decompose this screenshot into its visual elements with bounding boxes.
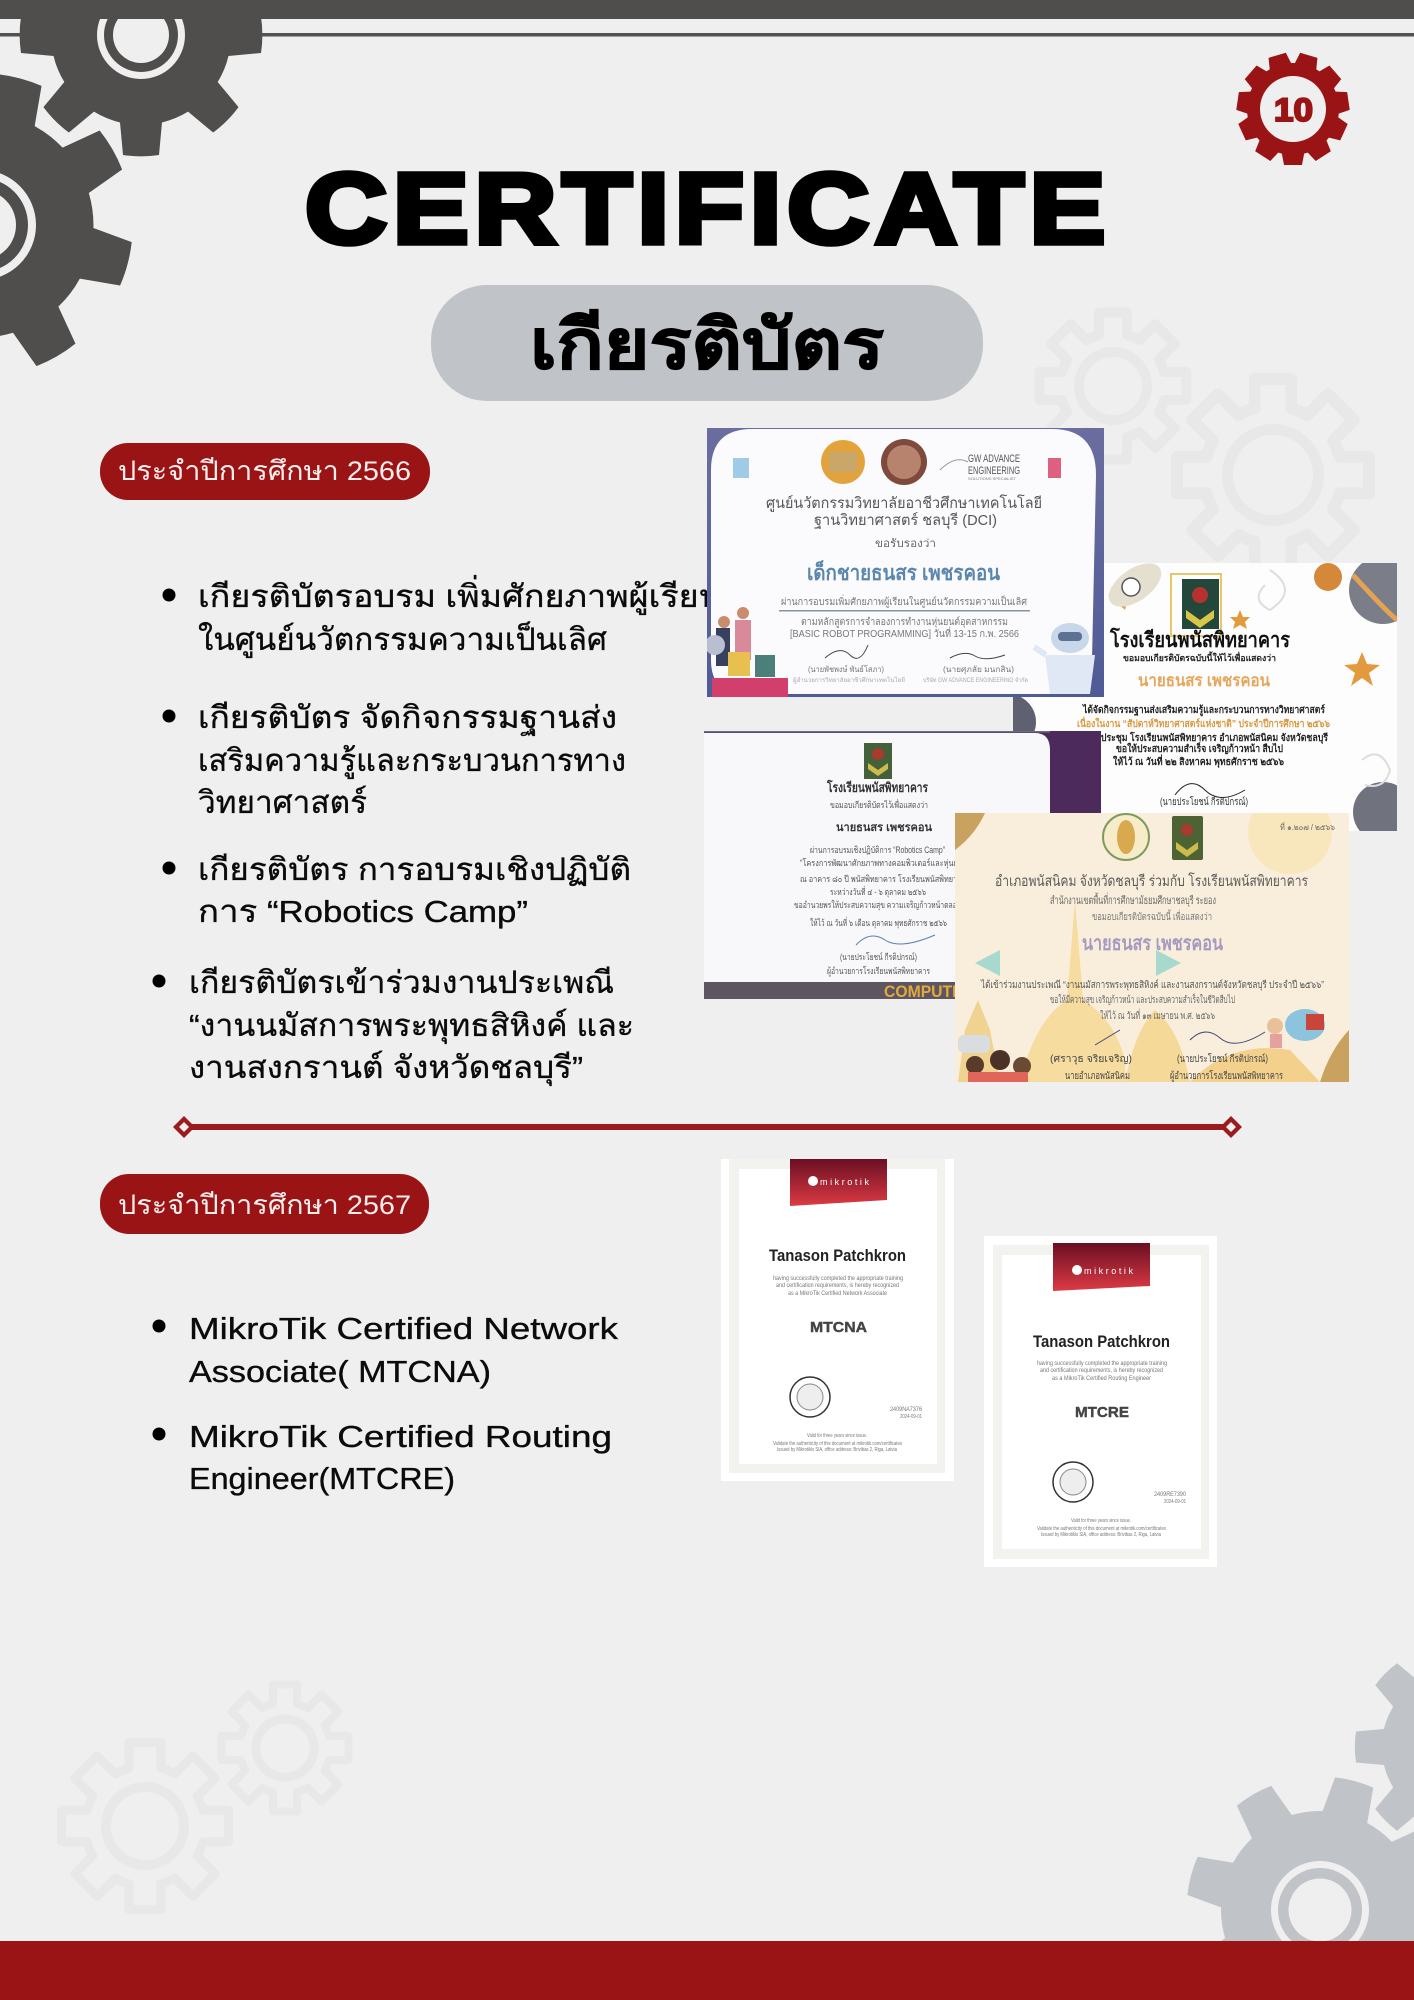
item 1: ในศูนย์นวัตกรรมความเป็นเลิศ [198,621,607,658]
item 1: เกียรติบัตรอบรม เพิ่มศักยภาพผู้เรียน [198,575,722,615]
certificate: MTCNA: Issued by Mikrotikls SIA, office address: Brivibas 2, Riga, Latvia [777,1447,897,1453]
certificate: MTCRE: Tanason Patchkron [1033,1332,1170,1351]
certificate text: นายธนสร เพชรคอน [1082,933,1223,955]
certificate text: ผู้อำนวยการโรงเรียนพนัสพิทยาคาร [1170,1069,1283,1082]
banner: mikrotik [1084,1266,1134,1276]
page number badge [1236,52,1350,165]
list 2566 [152,575,722,1087]
certificate text: ให้ไว้ ณ วันที่ ๒๒ สิงหาคม พุทธศักราช ๒๕๖๖ [1113,754,1285,768]
certificate text: บริษัท GW ADVANCE ENGINEERING จำกัด [923,677,1028,684]
certificate text: (นายพัชพงษ์ พันธ์โสภา) [808,664,884,674]
item 4: เกียรติบัตรเข้าร่วมงานประเพณี [189,965,614,1000]
certificate text: ที่ ๑.๒๐๗ / ๒๕๖๖ [1280,821,1335,832]
certificate text: เนื่องในงาน “สัปดาห์วิทยาศาสตร์แห่งชาติ” ประจำปีการศึกษา ๒๕๖๖ [1077,716,1331,730]
certificate text: ขอให้ประสบความสำเร็จ เจริญก้าวหน้า สืบไป [1116,741,1283,755]
certificate text: (นายประโยชน์ กีรติปกรณ์) [840,951,917,962]
certificate: MTCNA: Valid for three years since issue. [807,1433,867,1439]
item 3: การ “Robotics Camp” [198,894,528,929]
certificate: MTCNA: Tanason Patchkron [769,1246,906,1265]
logos: ENGINEERING [968,465,1020,477]
certificate text: สำนักงานเขตพื้นที่การศึกษามัธยมศึกษาชลบุรี ระยอง [1050,892,1216,907]
school emblem [864,743,892,779]
certificate: MTCRE [984,1236,1217,1567]
seal [1053,1462,1093,1502]
item 1 [162,575,722,658]
banner [790,1159,887,1206]
dark gear left [0,39,167,411]
certificate text: โรงเรียนพนัสพิทยาคาร [1109,627,1291,652]
decorative outline gear top right small [1040,312,1186,460]
item MTCRE: MikroTik Certified Routing [189,1419,612,1454]
item 4 [152,965,634,1087]
certificate text: ระหว่างวันที่ ๔ - ๖ ตุลาคม ๒๕๖๖ [830,885,926,898]
certificate text: (นายประโยชน์ กีรติปกรณ์) [1177,1052,1268,1065]
illustration: robot [1033,623,1095,694]
planet top left [1013,697,1036,731]
item 2: วิทยาศาสตร์ [197,785,367,820]
thin header line [0,33,1414,36]
certificate text: นายธนสร เพชรคอน [836,822,932,834]
top dark bar [0,0,1414,19]
list 2567 [152,1311,619,1496]
certificate: MTCRE: MTCRE [1075,1404,1129,1421]
certificate: MTCNA: having successfully completed the appropriate training [773,1276,903,1282]
certificate text: ขอมอบเกียรติบัตรฉบับนี้ เพื่อแสดงว่า [1092,909,1212,923]
certificate text: ฐานวิทยาศาสตร์ ชลบุรี (DCI) [814,512,997,530]
item 2: เสริมความรู้และกระบวนการทาง [198,743,626,779]
certificate text: (นายประโยชน์ กีรติปกรณ์) [1160,795,1248,808]
item 3 [162,852,631,929]
certificate text [1075,627,1331,808]
logos: SOLUTIONS SPECIALIST [968,476,1017,481]
certificate text: ผ่านการอบรมเชิงปฏิบัติการ “Robotics Camp” [810,845,945,855]
chips [733,458,1061,478]
certificate text: เด็กชายธนสร เพชรคอน [807,559,1001,585]
year label 2566: ประจำปีการศึกษา 2566 [118,456,411,486]
certificate text: ขอมอบเกียรติบัตรฉบับนี้ให้ไว้เพื่อแสดงว่า [1123,651,1276,663]
certificate text: ขอให้มีความสุข เจริญก้าวหน้า และประสบความสำเร็จในชีวิตสืบไป [1050,992,1235,1006]
certificate: MTCNA: 2409NA7376 [890,1407,923,1413]
item 3: เกียรติบัตร การอบรมเชิงปฏิบัติ [198,852,631,887]
seals [1103,814,1203,860]
certificate: MTCNA: as a MikroTik Certified Network Associate [788,1291,888,1297]
item MTCNA [152,1311,619,1389]
item 2 [162,700,626,820]
item 2: เกียรติบัตร จัดกิจกรรมฐานส่ง [198,700,617,736]
certificate text: ผู้อำนวยการวิทยาลัยอาชีวศึกษาเทคโนโลยี [793,676,905,684]
certificate text: ให้ไว้ ณ วันที่ ๑๓ เมษายน พ.ศ. ๒๕๖๖ [1100,1008,1215,1022]
page number badge: 10 [1274,92,1313,128]
year label 2566 [100,443,430,500]
certificate: DCI innovation centre [705,428,1104,697]
certificate text: ให้ไว้ ณ วันที่ ๖ เดือน ตุลาคม พุทธศักราช ๒๕๖๖ [810,916,947,929]
certificate: MTCRE: 2409RE7390 [1154,1492,1187,1498]
certificate text: ตามหลักสูตรการจำลองการทำงานหุ่นยนต์อุตสาหกรรม [801,616,1008,628]
certificate: MTCRE: 2024-09-01 [1164,1499,1186,1505]
certificate text [794,779,970,977]
illustration: people [705,607,788,697]
certificate text [980,821,1335,1082]
certificate: MTCRE: and certification requirements, is hereby recognized [1040,1368,1163,1374]
certificate text: ขอรับรองว่า [875,538,936,550]
certificate text: ขออำนวยพรให้ประสบความสุข ความเจริญก้าวหน้าตลอดไป [794,900,969,911]
certificate text: อำเภอพนัสนิคม จังหวัดชลบุรี ร่วมกับ โรงเรียนพนัสพิทยาคาร [995,872,1308,891]
certificate: MTCRE: Issued by Mikrotikls SIA, office address: Brivibas 2, Riga, Latvia [1041,1532,1161,1538]
decorative outline gear bottom left small [222,1684,348,1812]
certificate text: ขอมอบเกียรติบัตรไว้เพื่อแสดงว่า [830,798,928,810]
bottom red bar [0,1941,1414,2000]
certificate text [766,494,1042,684]
certificate: MTCNA [721,1159,954,1481]
certificate: MTCRE: Valid for three years since issue. [1071,1518,1131,1524]
dark gear top [20,0,262,156]
seal [790,1377,830,1417]
temple illustration [958,900,1320,1082]
decorative outline gear top right large [1177,379,1369,571]
certificate text: ผู้อำนวยการโรงเรียนพนัสพิทยาคาร [827,966,930,977]
gray gear bottom right large [1157,1747,1414,2000]
certificate text: โรงเรียนพนัสพิทยาคาร [826,779,928,795]
certificate text: ณ ห้องประชุม โรงเรียนพนัสพิทยาคาร อำเภอพนัสนิคม จังหวัดชลบุรี [1075,731,1329,744]
item 4: “งานนมัสการพระพุทธสิหิงค์ และ [189,1008,634,1045]
item MTCNA: MikroTik Certified Network [189,1311,619,1346]
certificate: MTCRE: as a MikroTik Certified Routing Engineer [1052,1376,1151,1382]
subtitle pill [431,285,983,401]
certificate text: นายอำเภอพนัสนิคม [1065,1071,1130,1082]
certificate text: ณ อาคาร ๘๐ ปี พนัสพิทยาคาร โรงเรียนพนัสพิทยาคาร [800,874,970,884]
certificate text: [BASIC ROBOT PROGRAMMING] วันที่ 13-15 ก.พ. 2566 [790,626,1019,640]
year label 2567: ประจำปีการศึกษา 2567 [118,1190,411,1220]
illustration: children and elephant [958,1009,1325,1082]
certificate: MTCNA: 2024-09-01 [900,1414,922,1420]
certificate text: “โครงการพัฒนาศักยภาพทางคอมพิวเตอร์และหุ่นยนต์” [800,857,970,869]
certificate text: นายธนสร เพชรคอน [1138,671,1270,690]
logos: GW ADVANCE [968,453,1020,465]
certificate text: ผ่านการอบรมเพิ่มศักยภาพผู้เรียนในศูนย์นวัตกรรมความเป็นเลิศ [781,594,1028,608]
school emblem [1171,574,1221,636]
certificate: MTCRE: Validate the authenticity of this document at mikrotik.com/certificates [1037,1526,1166,1532]
decorative outline gear bottom left large [61,1742,228,1910]
certificate: robotics camp: COMPUTER [884,982,974,1001]
certificate: science week [1013,563,1397,831]
item MTCNA: Associate( MTCNA) [189,1354,491,1389]
item MTCRE [152,1419,612,1496]
certificate text: ได้จัดกิจกรรมฐานส่งเสริมความรู้และกระบวนการทางวิทยาศาสตร์ [1082,703,1326,717]
left diamond [173,1116,195,1138]
certificate: MTCNA: MTCNA [810,1319,867,1336]
subtitle pill: เกียรติบัตร [530,307,885,383]
certificate: MTCNA: Validate the authenticity of this document at mikrotik.com/certificates [773,1441,902,1447]
year label 2567 [100,1174,429,1234]
certificate: MTCNA: and certification requirements, is hereby recognized [776,1283,899,1289]
rocket [1108,563,1162,610]
certificate: robotics camp [704,731,1101,1001]
certificate text: (ศราวุธ จริยเจริญ) [1050,1054,1132,1065]
banner [1053,1243,1150,1291]
item 4: งานสงกรานต์ จังหวัดชลบุรี” [189,1050,583,1087]
certificate text: ศูนย์นวัตกรรมวิทยาลัยอาชีวศึกษาเทคโนโลยี [766,494,1042,512]
logos [821,439,1020,485]
certificate: MTCRE: having successfully completed the appropriate training [1037,1361,1167,1367]
right diamond [1220,1116,1242,1138]
planets and stars [1230,563,1397,831]
item MTCRE: Engineer(MTCRE) [189,1461,455,1496]
certificate: Songkran festival [955,790,1349,1082]
certificate text: ได้เข้าร่วมงานประเพณี “งานนมัสการพระพุทธสิหิงค์ และงานสงกรานต์จังหวัดชลบุรี ประจำปี ๒๕๖๖” [980,979,1324,991]
title: CERTIFICATE [305,153,1111,265]
certificate text: (นายศุภลัย มนกสิน) [943,665,1014,674]
gray gear bottom right small [1355,1643,1414,1851]
banner: mikrotik [820,1177,870,1187]
divider with diamonds [173,1116,1242,1138]
